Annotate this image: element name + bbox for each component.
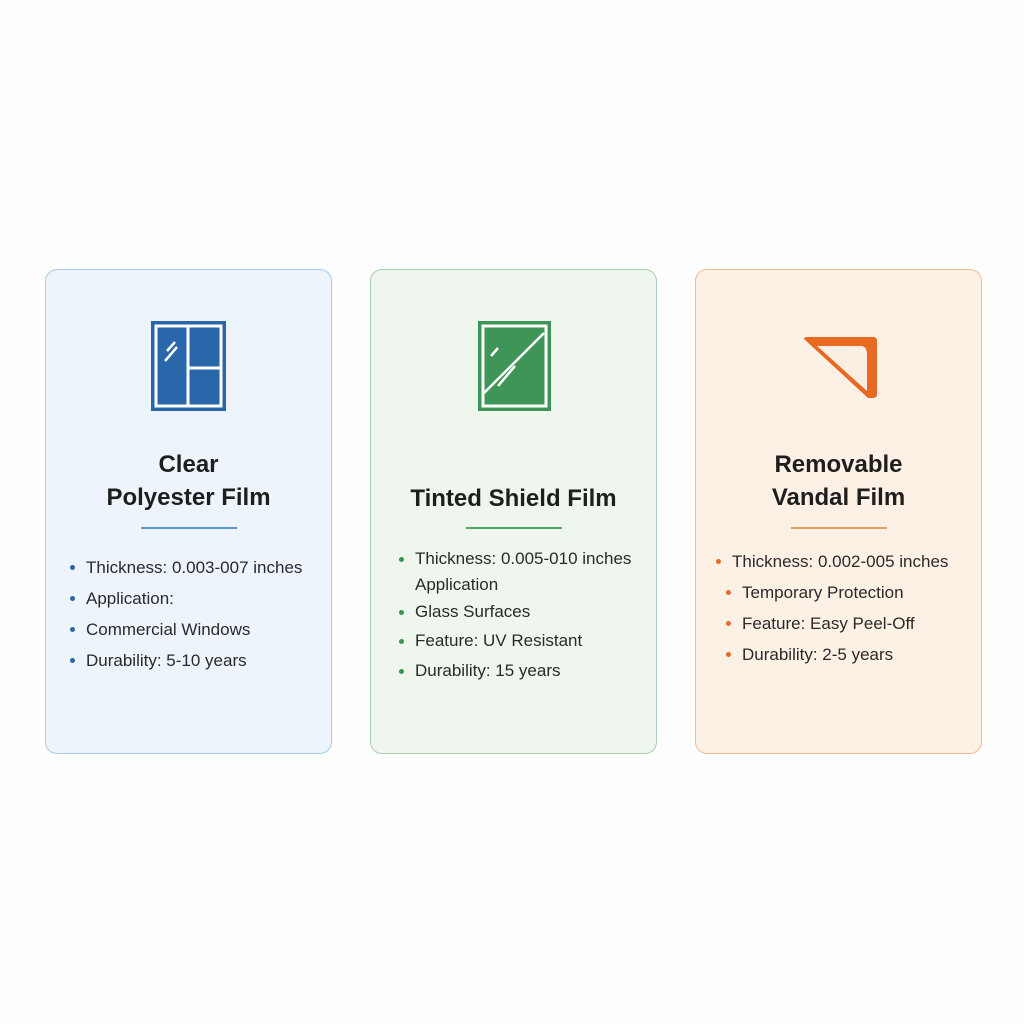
panel: removable vandal film: [695, 269, 982, 754]
list: Temporary Protection: [742, 583, 904, 602]
heading: Tinted Shield Film: [410, 485, 617, 512]
list: Application: [415, 575, 498, 594]
panel: clear polyester film: [45, 269, 332, 754]
list: Durability: 5-10 years: [86, 651, 247, 670]
panel: tinted shield film: [370, 269, 657, 754]
list: [399, 549, 631, 680]
heading: Removable: [774, 451, 903, 478]
list: Thickness: 0.005-010 inches: [415, 549, 631, 568]
list: [70, 558, 302, 670]
list: Durability: 15 years: [415, 661, 561, 680]
list: Durability: 2-5 years: [742, 645, 893, 664]
heading: [106, 451, 271, 511]
icon: glass pane: [478, 321, 551, 411]
heading: [772, 451, 905, 511]
list: Application:: [86, 589, 174, 608]
list: Feature: Easy Peel-Off: [742, 614, 915, 633]
list: Glass Surfaces: [415, 602, 530, 621]
list: Commercial Windows: [86, 620, 250, 639]
list: [716, 552, 948, 664]
heading: Vandal Film: [772, 484, 905, 511]
list: Thickness: 0.002-005 inches: [732, 552, 948, 571]
list: Feature: UV Resistant: [415, 631, 582, 650]
icon: window: [151, 321, 226, 411]
icon: peeling film: [804, 337, 877, 398]
list: Thickness: 0.003-007 inches: [86, 558, 302, 577]
heading: Clear: [158, 451, 219, 478]
heading: Polyester Film: [106, 484, 271, 511]
